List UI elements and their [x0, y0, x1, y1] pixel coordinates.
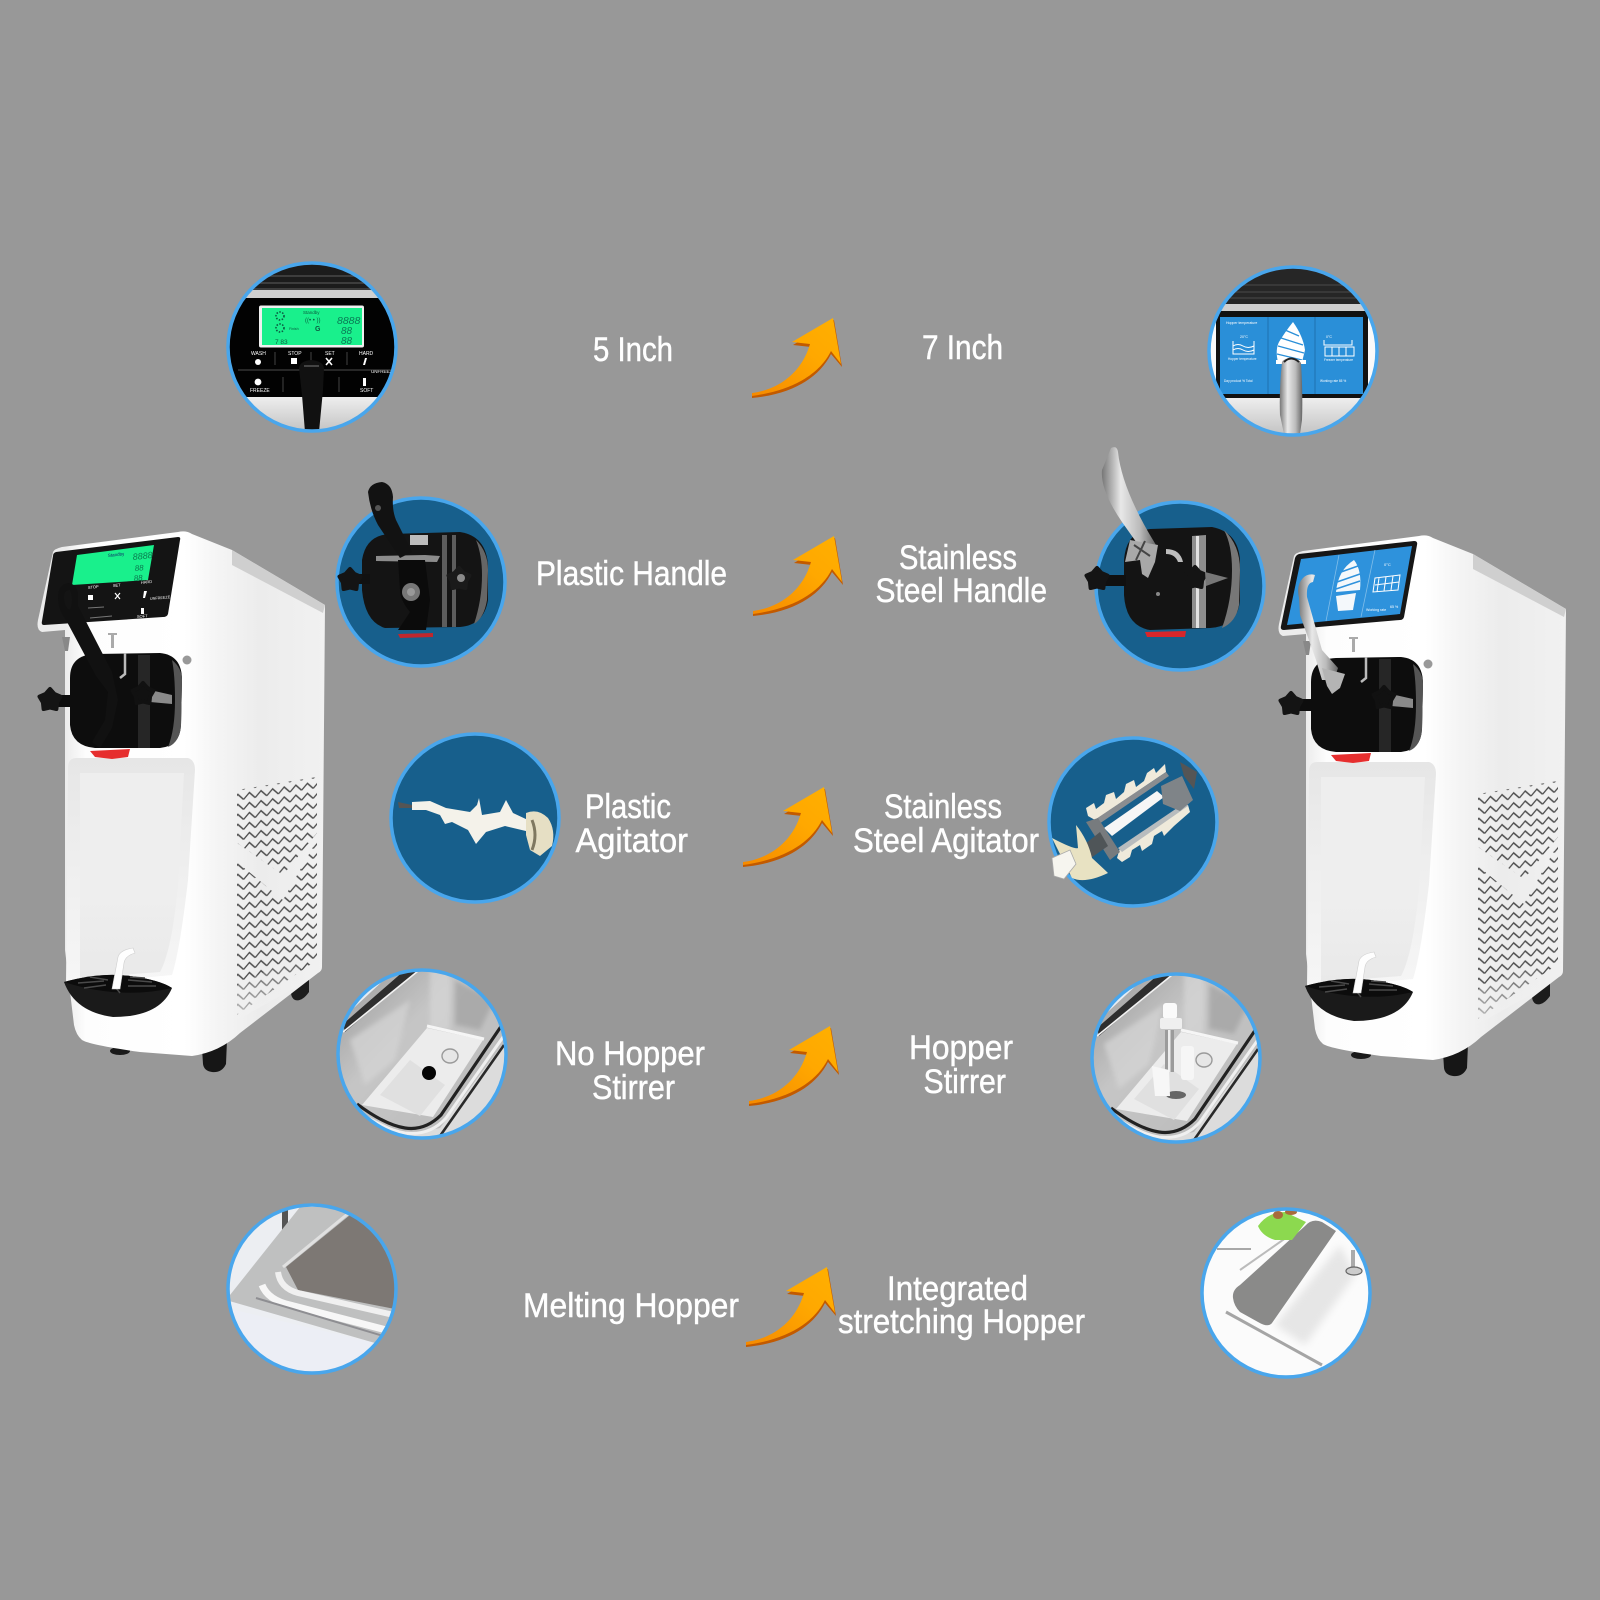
control panel: black frame with LCD: 88 [134, 563, 145, 573]
cage rods and blade [1096, 772, 1169, 824]
row 5: melting hopper photo [226, 1203, 400, 1375]
row 4: Hopper Stirrer label: Stirrer [924, 1063, 1006, 1101]
black handle lever [368, 482, 412, 558]
row 1: 7 inch touch screen photo: Freezer temperature [1324, 358, 1353, 362]
control panel: black frame with LCD [42, 537, 180, 625]
green LCD screen [259, 306, 364, 348]
row 1: 7 Inch label: 7 Inch [922, 329, 1003, 367]
row 2: Plastic Handle label: Plastic Handle [536, 555, 727, 593]
stainless steel handle [1298, 574, 1338, 680]
green LCD screen: Finish [289, 327, 299, 331]
row 5: Melting Hopper label: Melting Hopper [523, 1287, 739, 1325]
button labels [238, 351, 395, 394]
green LCD screen: G [315, 326, 321, 333]
row 1: 7 inch touch screen photo: Hopper temperature [1228, 357, 1257, 361]
ice cream swirl [1276, 322, 1306, 364]
green LCD screen: 88 [341, 336, 353, 347]
green LCD screen: 7 83 [275, 339, 288, 346]
row 1: 7 inch touch screen photo: Working rate 65 % [1320, 379, 1346, 383]
row 3: Plastic Agitator label: Plastic [585, 788, 671, 826]
row 4: No Hopper Stirrer label [555, 1035, 705, 1107]
green LCD screen: Standby [303, 310, 320, 315]
row 1: 7 inch touch screen photo: Day product % Total [1224, 379, 1253, 383]
row 1: 7 inch touch screen photo: Hopper temperature [1226, 321, 1257, 325]
row 3: Plastic Agitator label: Agitator [576, 822, 688, 860]
row 5: Integrated stretching Hopper label [838, 1270, 1085, 1341]
button labels: STOP [288, 351, 302, 357]
row 4: No Hopper Stirrer label: No Hopper [555, 1035, 705, 1073]
arrow 4 [749, 1026, 839, 1106]
white stirrer [1152, 1003, 1194, 1099]
row 3: Stainless Steel Agitator label [853, 788, 1039, 860]
button labels: SOFT [360, 388, 373, 394]
green LCD screen: ((• • )) [305, 318, 321, 324]
machine: 7 inch stainless handle model [1278, 535, 1566, 1076]
nozzle plate [1124, 527, 1240, 630]
silver handle [1280, 358, 1302, 434]
row 3: Stainless Steel Agitator label: Steel Agitator [853, 822, 1039, 860]
row 1: 5 inch display photo [226, 262, 398, 435]
touch screen: Working rate [1366, 608, 1386, 612]
row 2: plastic handle photo [337, 482, 505, 666]
black plastic handle [58, 583, 118, 748]
touch screen: 65 % [1390, 605, 1399, 609]
nozzle plate [362, 532, 488, 628]
bottom crenellated bar [1117, 805, 1190, 862]
control panel: black frame with LCD: Standby [108, 551, 125, 558]
control panel: black frame with LCD: 88 [133, 573, 144, 583]
machine: 5 inch plastic handle model [38, 531, 325, 1072]
control panel: black frame with LCD: UNFREEZE [150, 595, 171, 601]
row 5: Integrated stretching Hopper label: stretching Hopper [838, 1303, 1085, 1341]
touch screen: 0°C [1384, 562, 1391, 567]
row 3: Stainless Steel Agitator label: Stainless [884, 788, 1002, 826]
silver lever [1102, 447, 1156, 556]
button labels: HARD [359, 351, 374, 357]
row 5: Integrated stretching Hopper label: Integrated [887, 1270, 1028, 1308]
row 5: integrated hopper photo [1200, 1207, 1372, 1379]
row 2: Stainless Steel Handle label: Stainless [899, 539, 1017, 577]
row 1: 7 inch touch screen photo: 20°C [1240, 335, 1248, 339]
top crenellated bar [1086, 764, 1166, 820]
row 2: Stainless Steel Handle label: Steel Handle [876, 572, 1047, 610]
button labels: UNFREEZE [371, 369, 395, 374]
control panel: black frame with LCD: SOFT [137, 613, 148, 619]
row 3: stainless agitator photo [1049, 738, 1217, 906]
row 1: 7 inch touch screen photo [1207, 265, 1379, 438]
green LCD screen: 88 [341, 326, 353, 337]
arrow 2 [753, 536, 843, 616]
control panel: black frame with LCD: HARD [141, 579, 152, 585]
row 4: Hopper Stirrer label [909, 1029, 1013, 1101]
black handle [299, 360, 324, 432]
arrow 3 [743, 787, 833, 867]
row 4: hopper without stirrer photo [336, 968, 508, 1140]
row 1: 7 inch touch screen photo: 0°C [1326, 335, 1332, 339]
arrow 5 [746, 1267, 836, 1347]
row 3: plastic agitator photo [391, 734, 559, 902]
button labels: FREEZE [250, 388, 270, 394]
arrow 1 [752, 318, 842, 398]
button labels: SET [325, 351, 335, 357]
row 2: stainless handle photo [1086, 447, 1264, 670]
control panel: black frame with LCD: STOP [88, 584, 99, 590]
button labels: WASH [251, 351, 266, 357]
control panel: black frame with LCD: SET [113, 582, 121, 588]
row 1: 5 Inch label: 5 Inch [593, 331, 673, 369]
row 4: Hopper Stirrer label: Hopper [909, 1029, 1013, 1067]
row 4: No Hopper Stirrer label: Stirrer [592, 1069, 675, 1107]
row 4: hopper with stirrer photo [1090, 972, 1262, 1144]
green LCD screen: 8888 [337, 315, 361, 327]
row 3: Plastic Agitator label [576, 788, 688, 860]
touch screen [1281, 541, 1417, 630]
row 2: Stainless Steel Handle label [876, 539, 1047, 610]
control panel: black frame with LCD: 8888 [132, 550, 153, 562]
